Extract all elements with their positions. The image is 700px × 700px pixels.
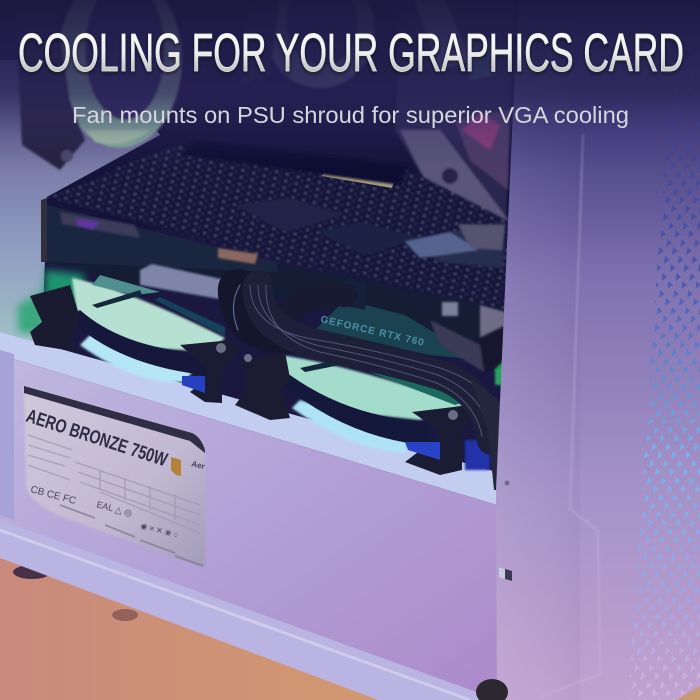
subtitle: Fan mounts on PSU shroud for superior VGA cooling xyxy=(72,102,629,128)
certification marks: CB CE FC xyxy=(29,484,77,507)
card plate with GEFORCE RTX text xyxy=(315,280,480,360)
panel slot xyxy=(499,567,512,581)
fan 1 left bracket xyxy=(30,285,80,352)
card underside shroud xyxy=(45,205,510,350)
fan 2 xyxy=(235,352,490,475)
fan 1 xyxy=(30,275,240,403)
case foot xyxy=(13,565,51,579)
fan 2 left bracket xyxy=(235,352,290,420)
bronze badge xyxy=(171,457,181,476)
PSU shroud front face xyxy=(0,350,500,700)
gold connector strip xyxy=(322,168,395,188)
spec table lines xyxy=(28,435,200,533)
graphics card xyxy=(41,140,510,350)
shroud bottom lip xyxy=(0,520,490,700)
shroud ledge and green glow xyxy=(0,270,497,505)
wooden table xyxy=(0,550,400,700)
top dark overlay xyxy=(0,0,700,170)
PSU label sticker xyxy=(23,386,206,568)
card bracket edge xyxy=(41,198,47,262)
wood corner at bottom right xyxy=(676,686,700,700)
heatsink and small parts at right xyxy=(430,302,505,385)
top fans behind the card xyxy=(15,0,375,170)
right case front panel xyxy=(476,0,700,700)
certification marks xyxy=(29,484,179,540)
thumb screw xyxy=(476,679,508,700)
left case wall xyxy=(0,60,160,345)
chips on board xyxy=(60,140,505,300)
power cable bundle xyxy=(231,282,505,490)
label title: AERO BRONZE 750W xyxy=(23,406,170,471)
wood knot xyxy=(112,609,138,621)
certification marks: ◉ ≡ ✕ ❀ ○ xyxy=(139,521,179,540)
motherboard and bracket at upper right xyxy=(395,0,515,235)
brand mark: Aer xyxy=(191,459,206,471)
fan 2 right bracket xyxy=(405,405,478,475)
perforated mesh of triangles xyxy=(628,50,700,700)
fan 1 right bracket xyxy=(180,340,240,403)
certification marks: EAL △ ◎ xyxy=(95,499,133,518)
card plate with GEFORCE RTX text: GEFORCE RTX 760 xyxy=(319,314,426,349)
circuit board top xyxy=(47,146,510,310)
front lower plate xyxy=(47,205,278,272)
panel screw hole xyxy=(504,480,510,486)
